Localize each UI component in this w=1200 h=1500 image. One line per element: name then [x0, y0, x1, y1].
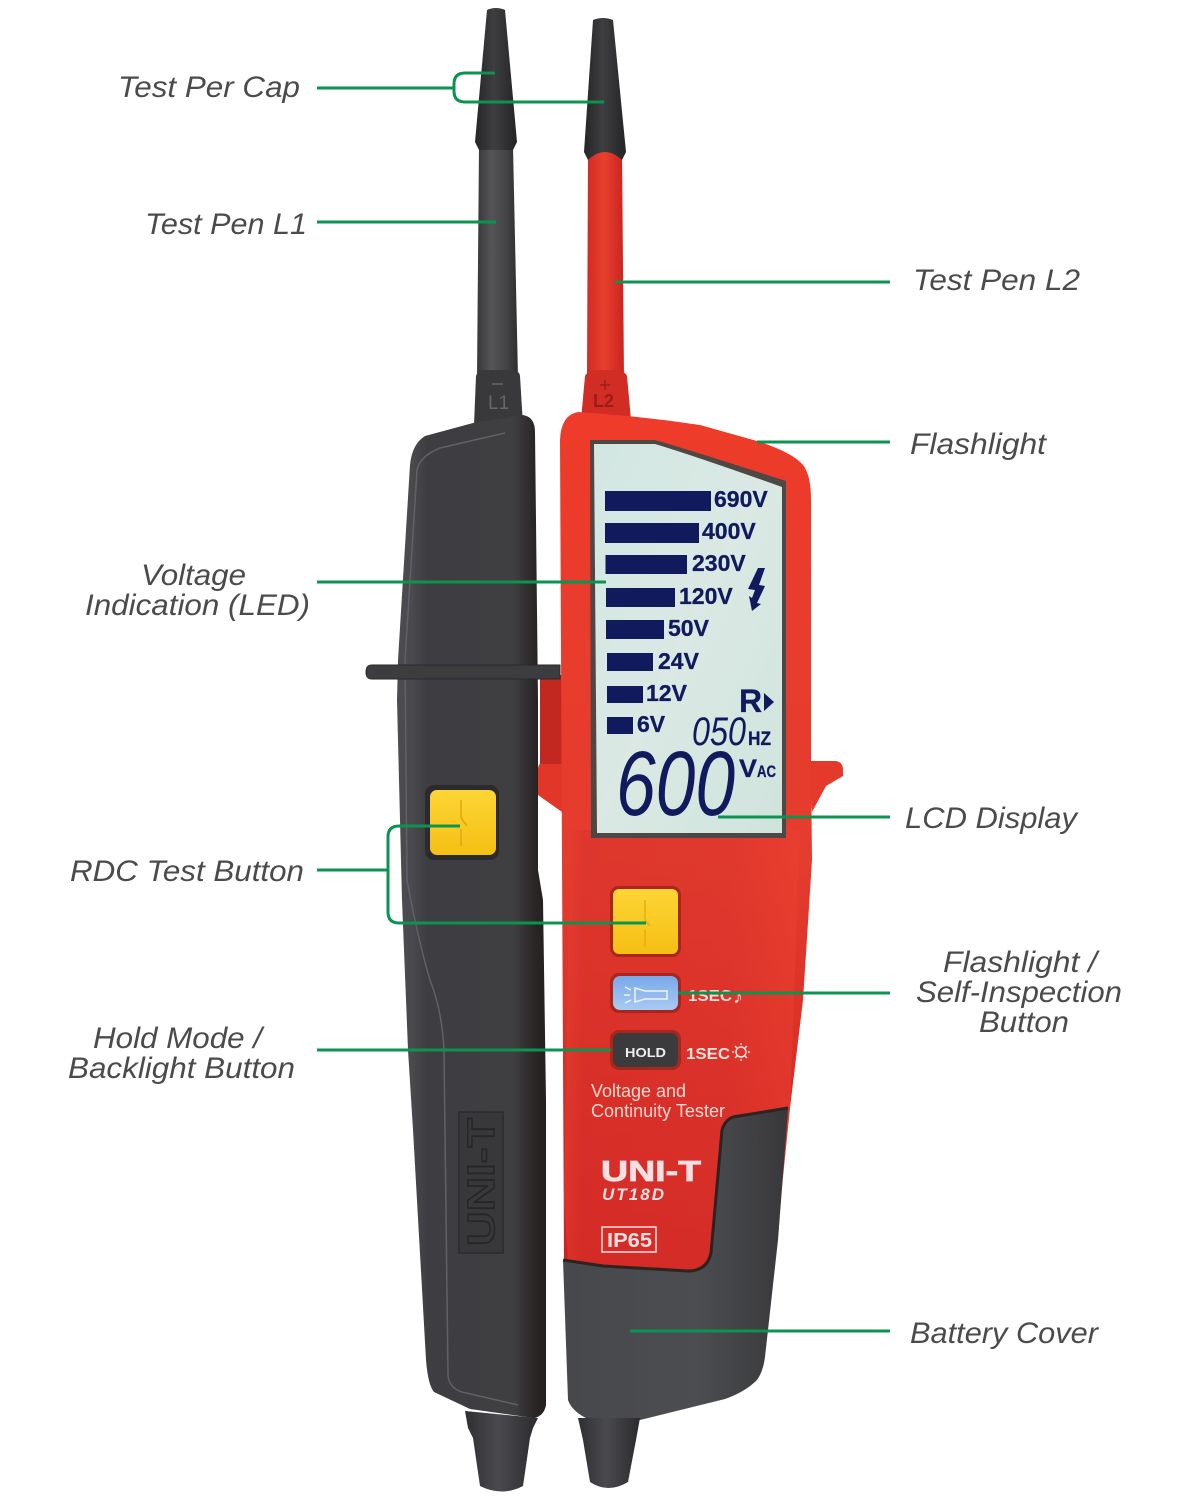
- voltage labels: 120V: [679, 583, 733, 609]
- label: test pen L1: Test Pen L1: [145, 208, 307, 241]
- R arrow indicator: R: [739, 683, 762, 719]
- battery cover: [563, 1108, 788, 1488]
- right plug: [578, 1418, 640, 1488]
- voltage labels: 6V: [637, 711, 666, 737]
- leader line: hold button: [317, 1048, 611, 1052]
- label: test pen L2: Test Pen L2: [913, 264, 1080, 297]
- red main body: [560, 412, 812, 1300]
- IP65 badge: [602, 1227, 656, 1252]
- side wings of red body: [538, 675, 843, 812]
- test pen cap L2: [584, 18, 626, 160]
- label: flashlight self-inspection button: Self-Inspection: [916, 976, 1122, 1009]
- leader line: LCD display: [718, 816, 890, 818]
- label: voltage indication: [85, 559, 310, 622]
- label: voltage indication: Voltage: [141, 559, 246, 592]
- label: flashlight self-inspection button: Button: [979, 1006, 1069, 1039]
- engraved L1 mark: L1: [488, 393, 509, 414]
- embossed logo panel: UNI-T: [461, 1118, 503, 1246]
- 1SEC backlight label: [686, 1043, 750, 1063]
- LCD display: [590, 440, 786, 838]
- 1SEC beep label: [688, 986, 743, 1008]
- R arrow indicator: [739, 683, 774, 719]
- brand logo: UNI-T: [601, 1156, 701, 1188]
- engraved L2 mark: [593, 380, 614, 411]
- label: LCD display: LCD Display: [905, 802, 1079, 835]
- hold button: [610, 1030, 681, 1070]
- voltage labels: 690V: [714, 486, 768, 512]
- clip bar: [366, 665, 560, 679]
- icon: lightning warning: [748, 568, 765, 611]
- leader line: flashlight button: [678, 992, 890, 994]
- blue flashlight button: [610, 973, 681, 1013]
- frequency readout: 050: [692, 710, 746, 754]
- voltage labels: [637, 486, 768, 737]
- test pen L2: [581, 18, 631, 420]
- leader line: battery cover: [630, 1330, 890, 1332]
- engraved L2 mark: L2: [593, 391, 614, 411]
- leader line: voltage indication: [317, 580, 606, 584]
- voltage labels: 50V: [668, 615, 710, 641]
- leader line: test pen caps: [317, 73, 604, 102]
- leader line: test pen L2: [615, 280, 890, 284]
- test pen cap L1: [475, 8, 517, 150]
- left plug: [465, 1411, 538, 1492]
- voltage labels: 400V: [702, 518, 756, 544]
- hold button: HOLD: [625, 1045, 666, 1060]
- model number: UT18D: [602, 1185, 664, 1204]
- left yellow RDC button: [425, 785, 499, 860]
- yellow RDC button: [610, 886, 681, 957]
- main voltage readout: 600: [616, 733, 735, 835]
- 1SEC backlight label: 1SEC: [686, 1046, 730, 1063]
- IP65 badge: IP65: [607, 1230, 652, 1252]
- leader line: RDC test button: [317, 826, 646, 923]
- test pen L1: [474, 8, 523, 425]
- product name: Continuity Tester: [591, 1101, 725, 1121]
- inner panel edge: [405, 433, 518, 1405]
- label: battery cover: Battery Cover: [910, 1317, 1099, 1350]
- label: flashlight self-inspection button: Flashlight /: [943, 946, 1100, 979]
- label: flashlight: Flashlight: [910, 428, 1048, 461]
- label: voltage indication: Indication (LED): [85, 589, 310, 622]
- embossed logo panel: [459, 1112, 503, 1253]
- voltage labels: 230V: [692, 550, 746, 576]
- left black body: [366, 415, 560, 1492]
- label: flashlight self-inspection button: [916, 946, 1122, 1039]
- label: hold mode backlight button: Hold Mode /: [93, 1022, 265, 1055]
- voltage labels: 24V: [658, 648, 700, 674]
- label: hold mode backlight button: Backlight Button: [68, 1052, 295, 1085]
- 1SEC beep label: 1SEC: [688, 988, 732, 1005]
- voltage indicator bars: [605, 491, 711, 734]
- leader line: test pen L1: [317, 220, 496, 224]
- leader line: flashlight: [757, 440, 890, 444]
- product name: Voltage and: [591, 1081, 686, 1101]
- label: hold mode backlight button: [68, 1022, 295, 1085]
- voltage labels: 12V: [646, 680, 688, 706]
- main voltage readout: V: [739, 755, 757, 783]
- main voltage readout: AC: [757, 762, 776, 781]
- product name: [591, 1081, 725, 1121]
- label: test per cap: Test Per Cap: [118, 71, 300, 104]
- frequency readout: HZ: [748, 729, 771, 750]
- label: RDC test button: RDC Test Button: [70, 855, 304, 888]
- 1SEC beep label: ♪: [733, 986, 743, 1008]
